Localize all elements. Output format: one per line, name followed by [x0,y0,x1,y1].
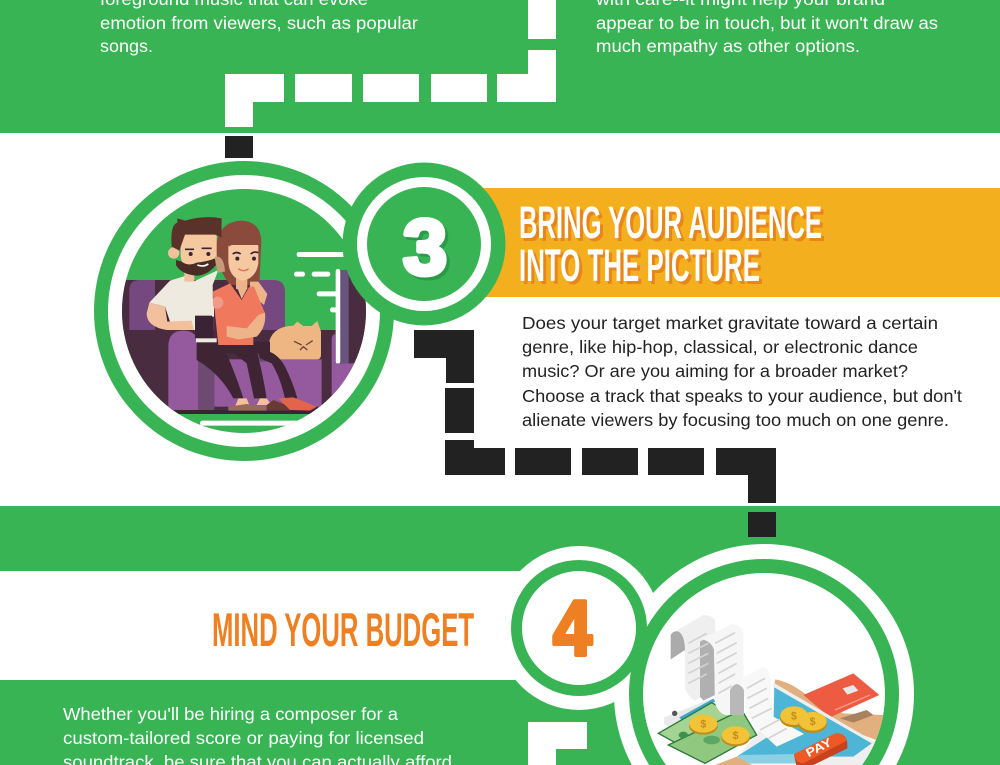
text block: section 4 body: Whether you'll be hiring a composer for a [63,704,398,724]
illustration: receipts and payment in circle: $ [733,730,739,742]
text block: right column: appear to be in touch, but it won't draw as [596,13,938,33]
wall lines [294,252,344,312]
text block: section 4 body [63,704,452,765]
woman arm behind [250,282,267,305]
text block: left column: emotion from viewers, such as popular [100,13,418,33]
man body [149,270,218,330]
man head [168,247,179,259]
arrow: white dashed connector [225,0,556,127]
sofa [122,280,250,330]
badge: number 3 circle: 3 [406,206,450,294]
pay button [794,734,847,765]
panel: heading band section 3 [480,188,1000,297]
illustration: receipts and payment in circle: PAY [803,735,834,760]
text block: section 3 body: Does your target market gravitate toward a certain [522,313,938,333]
heading: bring your audience into the picture [519,197,825,294]
text block: section 4 body: custom-tailored score or paying for licensed [63,728,424,748]
text block: right column: much empathy as other options. [596,36,860,56]
illustration: receipts and payment in circle: $ [700,718,706,730]
text block: section 3 body: genre, like hip-hop, classical, or electronic dance [522,337,918,357]
woman body [213,283,265,345]
tablet [730,683,877,765]
heading: bring your audience into the picture: INTO THE PICTURE [519,240,760,291]
cash [657,702,730,742]
heading: bring your audience into the picture: INTO THE PICTURE [522,243,763,294]
arrow: black dashed connector [414,330,776,537]
text block: section 3 body: Choose a track that speaks to your audience, but don't [522,386,962,406]
arrow: black dash above circle 3 [225,136,253,158]
hand [773,679,883,742]
arrow: white dashed connector bottom [528,722,587,765]
illustration: receipts and payment in circle: $ [791,710,797,722]
panel: bottom green band [0,506,1000,765]
panel: top green band [0,0,1000,133]
text block: section 3 body [522,313,962,430]
badge: number 4 circle [511,560,647,696]
credit card [803,673,879,717]
badge: number 4 circle: 4 [553,584,592,672]
heading: mind your budget: MIND YOUR BUDGET [212,603,474,656]
legs [197,342,270,353]
text block: section 3 body: alienate viewers by focusing too much on one genre. [522,410,949,430]
mug [195,307,217,342]
illustration: receipts and payment in circle [497,544,914,765]
illustration: receipts and payment in circle: $ [810,716,816,728]
badge: number 3 circle: 3 [403,203,447,291]
receipts [671,631,685,659]
illustration: couple on sofa in circle [94,161,394,461]
badge: number 3 circle [342,162,506,326]
text block: right column [595,0,938,56]
woman face [228,245,258,281]
hand bottom [715,757,755,765]
slippers [235,398,272,407]
cat [268,321,321,359]
text block: section 3 body: music? Or are you aiming for a broader market? [522,361,908,381]
printer [664,700,715,726]
text block: left column: songs. [100,36,153,56]
woman hair back [216,221,261,285]
text block: left column [100,0,418,56]
panel: heading band section 4 [0,571,560,680]
coins [689,724,718,735]
